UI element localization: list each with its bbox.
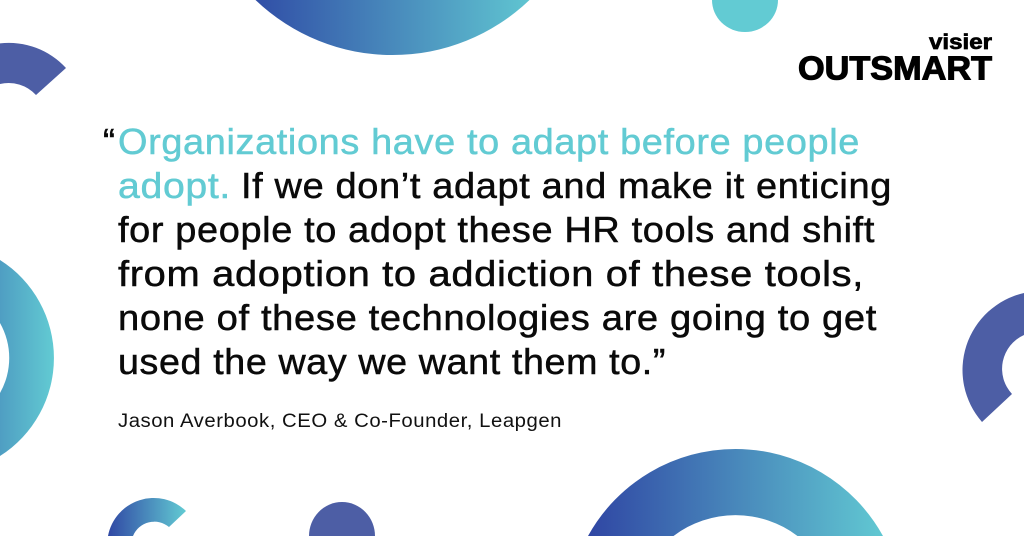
shape: right purple arc [963, 293, 1024, 422]
logo word: OUTSMART: OUTSMART [798, 50, 992, 86]
attribution: Jason Averbook, CEO & Co-Founder, Leapgen [118, 411, 562, 432]
quote text [103, 121, 892, 382]
shape: top centre gradient circle [256, 0, 530, 55]
shape: top teal circle [712, 0, 778, 32]
highlighted lead sentence, line 1: Organizations have to adapt before people [118, 121, 860, 162]
quote body, line 5: none of these technologies are going to get [118, 297, 877, 338]
shape: bottom small gradient arc [108, 498, 186, 536]
opening quotation mark: “ [103, 121, 116, 162]
logo word: visier: visier [929, 31, 992, 54]
shape: bottom large gradient arc [588, 449, 883, 536]
quote body, line 3: for people to adopt these HR tools and shift [118, 209, 875, 250]
logo: Visier Outsmart [798, 31, 992, 86]
quote body, line 4: from adoption to addiction of these tools, [118, 253, 864, 294]
shape: bottom purple semicircle [309, 502, 375, 536]
highlighted lead sentence, line 2: adopt. [118, 165, 231, 206]
shape: top left purple arc [0, 43, 66, 95]
shape: left gradient ring [0, 260, 54, 456]
quote body, line 2: If we don’t adapt and make it enticing [241, 165, 892, 206]
quote body, line 6: used the way we want them to.” [118, 341, 666, 382]
